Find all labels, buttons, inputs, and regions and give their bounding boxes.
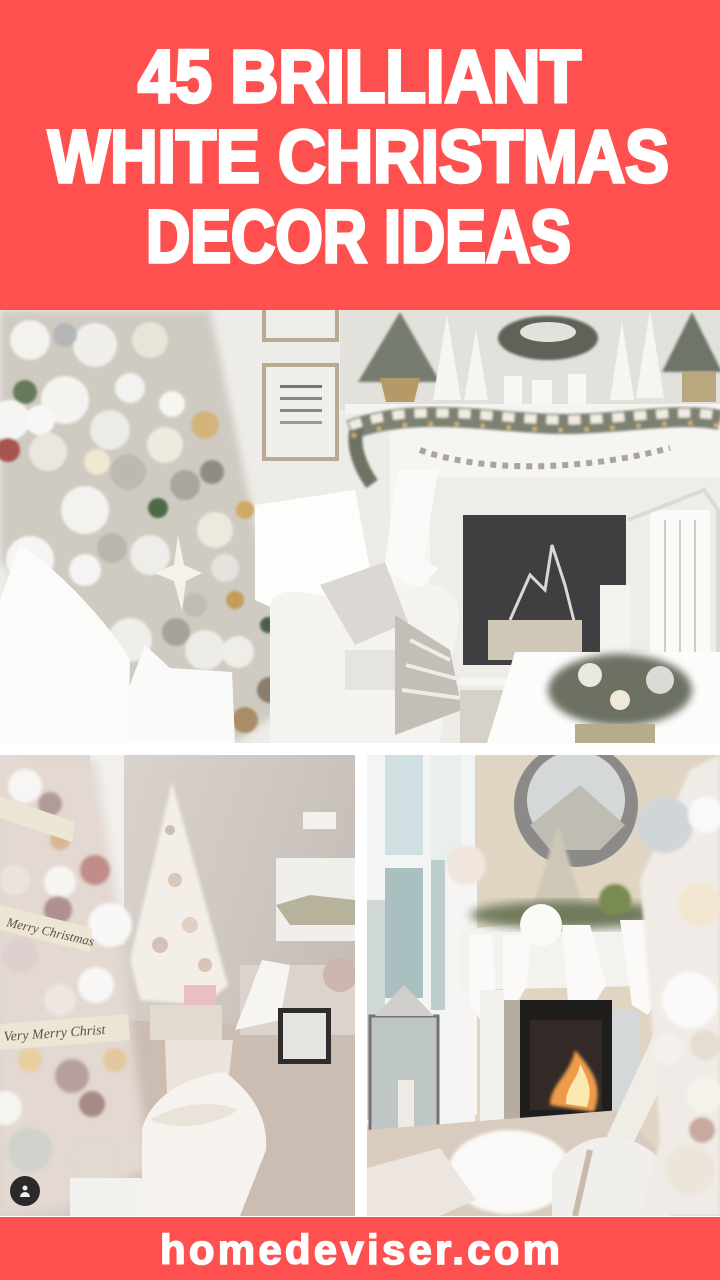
flocked christmas tree xyxy=(0,310,295,743)
flocked tree at right xyxy=(637,755,720,1216)
tree ribbon xyxy=(0,796,130,1050)
floor and fur rug xyxy=(367,1110,720,1216)
window xyxy=(367,755,477,1125)
footer banner xyxy=(0,1217,720,1280)
garland xyxy=(350,413,720,484)
sled xyxy=(628,490,718,665)
framed sheet music xyxy=(262,310,339,461)
birch logs and white sack xyxy=(552,1010,692,1216)
title: DECOR IDEAS xyxy=(146,195,571,278)
tree ribbon: Merry Christmas xyxy=(4,914,96,949)
big flocked tree xyxy=(0,755,150,1216)
wall art xyxy=(276,858,355,941)
fireplace pillars xyxy=(480,990,640,1125)
profile badge xyxy=(10,1176,40,1206)
stockings xyxy=(470,920,672,1023)
small white tree xyxy=(130,782,228,1005)
bead garland xyxy=(420,448,670,466)
website url: homedeviser.com xyxy=(160,1226,560,1273)
fireplace surround xyxy=(345,404,720,685)
mantel trees and village xyxy=(358,310,720,406)
firebox xyxy=(520,1000,612,1136)
floor and table xyxy=(460,585,720,743)
photo: white living room with flocked tree and fireplace xyxy=(0,310,720,743)
wall and floor xyxy=(0,755,355,1216)
round mirror xyxy=(514,743,638,867)
photo: flocked pink tree in neutral living room xyxy=(0,755,355,1216)
tree ribbon: Very Merry Christ xyxy=(3,1023,107,1045)
armchair and pillows xyxy=(255,490,462,743)
foreground cushions xyxy=(0,545,235,743)
title: 45 BRILLIANT xyxy=(138,35,581,118)
title banner xyxy=(0,0,720,310)
stocking xyxy=(384,470,438,590)
glass lantern xyxy=(370,985,438,1134)
white fur sack xyxy=(70,1072,266,1216)
title xyxy=(48,35,669,278)
sofa and rug items xyxy=(150,958,357,1095)
mantel xyxy=(446,845,690,990)
wall xyxy=(0,310,720,743)
wall xyxy=(367,755,720,1216)
sequin tree xyxy=(530,825,586,915)
photo: white mantel, mirror and lit fireplace xyxy=(367,755,720,1216)
